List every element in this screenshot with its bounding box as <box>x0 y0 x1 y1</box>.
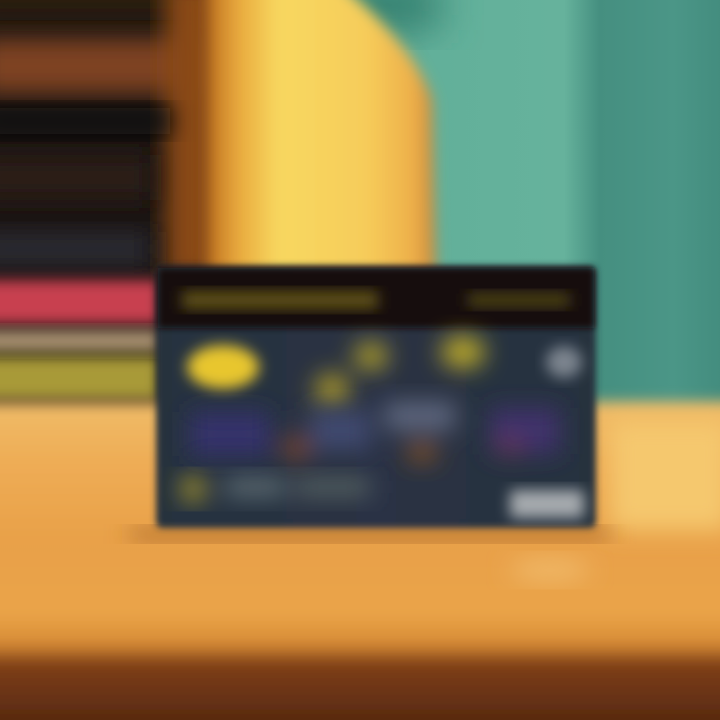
credit card <box>156 266 596 528</box>
purple and orange details <box>190 402 560 463</box>
yellow chip <box>187 345 259 389</box>
card header band <box>158 268 594 328</box>
card logo <box>510 490 584 518</box>
grey badge <box>546 346 582 378</box>
background: teal wall <box>300 0 720 420</box>
shelf: stacked books at left <box>0 0 220 420</box>
yellow markers <box>315 336 485 407</box>
card body <box>156 266 596 528</box>
table: wooden surface <box>0 402 720 720</box>
bottom row details <box>181 475 370 503</box>
object: yellow box behind the card <box>205 0 436 280</box>
